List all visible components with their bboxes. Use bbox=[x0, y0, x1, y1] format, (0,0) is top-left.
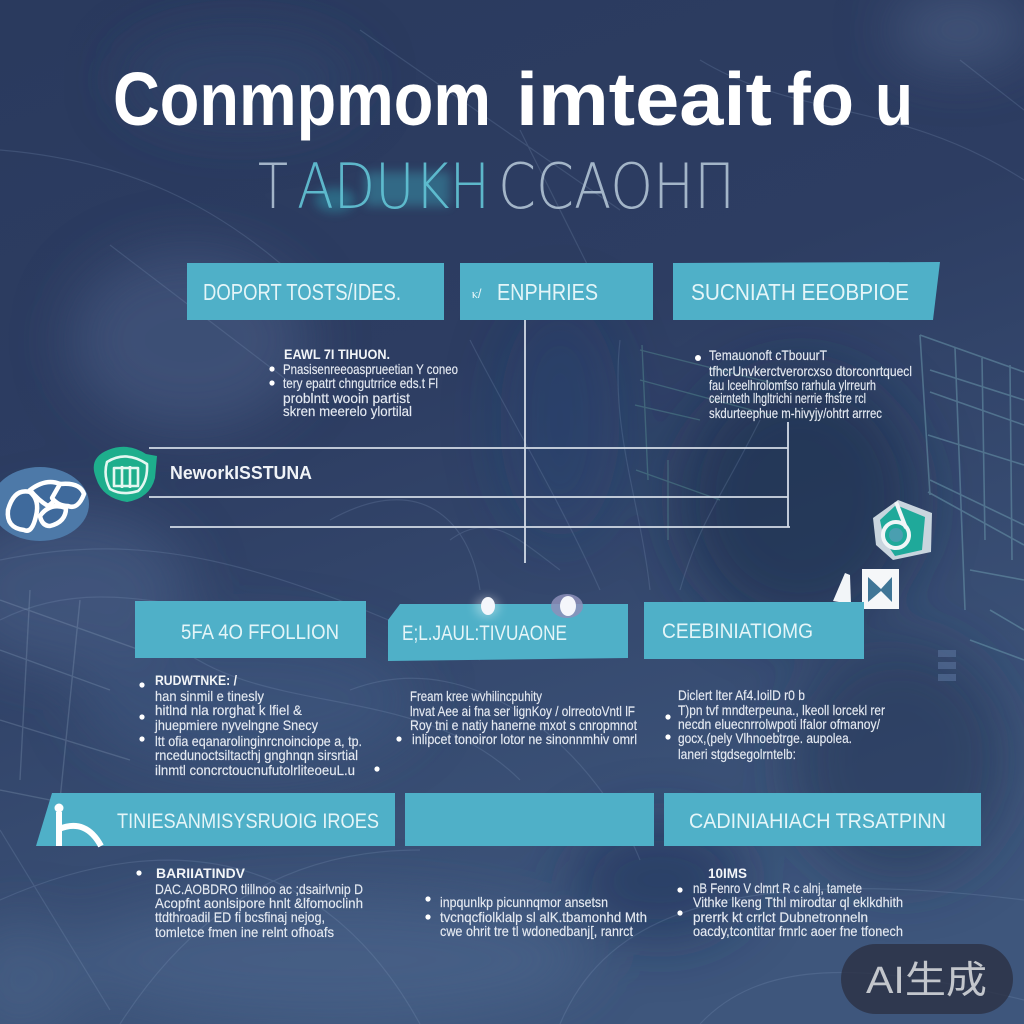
icon: bookmark bbox=[862, 569, 899, 609]
text block: middle centre: Fream kree wvhilincpuhity bbox=[410, 688, 542, 704]
panel: middle row left header: 5FA 4O FFOLLION bbox=[181, 621, 339, 644]
text block: middle centre: Roy tni e natiy hanerne mxot s cnropmnot bbox=[410, 717, 637, 733]
text block: top right: tfhcrUnvkerctverorcxso dtorconrtquecl bbox=[709, 363, 912, 379]
icon: white figure bbox=[54, 804, 101, 846]
subtitle: T bbox=[258, 150, 288, 223]
panel: top right header bbox=[673, 262, 940, 320]
text block: bottom left: BARIIATINDV bbox=[156, 865, 246, 881]
text block: top right: Temauonoft cTbouurT bbox=[709, 347, 827, 363]
title bbox=[113, 57, 913, 141]
title: Conmpmom bbox=[113, 57, 491, 141]
panel: middle row right header: CEEBINIATIOMG bbox=[662, 620, 813, 643]
text block: middle right bbox=[665, 687, 885, 762]
text block: top right: skdurteephue m-hivyjy/ohtrt arrrec bbox=[709, 405, 882, 421]
text block: middle left: rncedunoctsiltacthj gnghnqn sirsrtial bbox=[155, 747, 358, 763]
icon: glowing nodes bbox=[475, 594, 583, 618]
panel: top left header bbox=[187, 263, 444, 320]
icon: blue network blob bbox=[0, 467, 89, 541]
panel: bottom right header bbox=[664, 793, 981, 846]
title: imteait bbox=[516, 57, 772, 141]
panel: middle row right header bbox=[644, 602, 864, 659]
panel: top middle header: ⲕ/ bbox=[472, 286, 482, 301]
text block: bottom left: DAC.AOBDRO tlillnoo ac ;dsairlvnip D bbox=[155, 881, 363, 897]
text block: bottom left bbox=[136, 865, 363, 940]
icon: white cone bbox=[833, 573, 851, 604]
text block: middle left: ltt ofia eqanarolinginrcnoinciope a, tp. bbox=[155, 733, 362, 749]
text block: top left: skren meerelo ylortilal bbox=[283, 403, 412, 419]
text block: top left: problntt wooin partist bbox=[283, 390, 410, 406]
text block: middle centre bbox=[396, 688, 637, 747]
text block: middle left: ilnmtl concrctoucnufutolrliteoeuL.u bbox=[155, 762, 355, 778]
text block: bottom centre bbox=[425, 894, 647, 939]
subtitle: ADUKH bbox=[297, 150, 490, 223]
text block: bottom right: prerrk kt crrlct Dubnetronneln bbox=[693, 909, 868, 925]
text block: middle left: hitlnd nla rorghat k lfiel & bbox=[155, 702, 303, 718]
panel: middle row centre header bbox=[388, 604, 628, 661]
text block: bottom left: Acopfnt aonlsipore hnlt &lfomoclinh bbox=[155, 895, 363, 911]
panel: top middle header: ENPHRIES bbox=[497, 279, 598, 305]
text block: middle right: T)pn tvf mndterpeuna., lkeoll lorcekl rer bbox=[678, 702, 885, 718]
text block: top right: ceirnteth lhgltrichi nerrie fhstre rcl bbox=[709, 390, 866, 406]
text block: middle left bbox=[139, 672, 380, 778]
text block: bottom right: nB Fenro V clmrt R c alnj, tamete bbox=[693, 880, 862, 896]
text block: bottom right: oacdy,tcontitar frnrlc aoer fne tfonech bbox=[693, 923, 903, 939]
icon: green badge bbox=[94, 447, 157, 502]
title: fo bbox=[787, 57, 854, 141]
text block: middle right: Diclert lter Af4.IoilD r0 b bbox=[678, 687, 805, 703]
subtitle bbox=[258, 150, 735, 223]
text block: middle right: necdn eluecnrrolwpoti lfalor ofmanoy/ bbox=[678, 716, 880, 732]
diagram: connector lines bbox=[149, 320, 790, 563]
watermark badge bbox=[841, 944, 1013, 1014]
text block: middle left: RUDWTNKE: / bbox=[155, 672, 237, 688]
right wireframe grid bbox=[920, 335, 1024, 660]
text block: top left: EAWL 7I TIHUON. bbox=[284, 346, 390, 362]
panel: top middle header bbox=[460, 263, 653, 320]
text block: middle right: gocx,(pely Vlhnoebtrge. aupolea. bbox=[678, 730, 852, 746]
text block: bottom centre: cwe ohrit tre tl wdonedbanj[, ranrct bbox=[440, 923, 633, 939]
icon: teal gear bbox=[873, 500, 932, 560]
panel: middle row left header bbox=[135, 601, 366, 658]
panel: bottom left header bbox=[36, 793, 395, 846]
text block: middle left: jhuepmiere nyvelngne Snecy bbox=[154, 717, 318, 733]
title: u bbox=[875, 57, 913, 141]
panel: bottom right header: CADINIAHIACH TRSATPINN bbox=[689, 810, 946, 833]
panel: top right header: SUCNIATH EEOBPIOE bbox=[691, 279, 909, 305]
text block: middle centre: inlipcet tonoiror lotor ne sinonnmhiv omrl bbox=[412, 731, 637, 747]
text block: top left bbox=[269, 346, 458, 419]
watermark badge: AI生成 bbox=[866, 960, 987, 1002]
text block: middle left: han sinmil e tinesly bbox=[155, 688, 264, 704]
subtitle: CCAOHП bbox=[498, 150, 735, 223]
text block: bottom centre: tvcnqcfiolklalp sl alK.tbamonhd Mth bbox=[440, 909, 647, 925]
panel: bottom left header: TINIESANMISYSRUOIG IROES bbox=[117, 810, 379, 833]
text block: bottom left: ttdthroadil ED fi bcsfinaj nejog, bbox=[155, 909, 325, 925]
text block: top right bbox=[695, 347, 912, 421]
text block: top left: tery epatrt chngutrrice eds.t Fl bbox=[283, 375, 438, 391]
text block: bottom centre: inpqunlkp picunnqmor ansetsn bbox=[440, 894, 608, 910]
text block: bottom right: 10IMS bbox=[708, 865, 747, 881]
panel: middle row centre header: E;L.JAUL:TIVUAONE bbox=[402, 622, 567, 645]
text block: bottom right: Vithke lkeng Tthl mirodtar ql eklkdhith bbox=[693, 894, 903, 910]
panel: bottom centre header bbox=[405, 793, 654, 846]
text block: top left: Pnasisenreeoasprueetian Y coneo bbox=[283, 361, 458, 377]
text block: middle right: laneri stgdsegolrntelb: bbox=[678, 746, 796, 762]
text block: bottom right bbox=[677, 865, 903, 939]
label: network row: NeworkISSTUNA bbox=[170, 463, 312, 483]
text block: bottom left: tomletce fmen ine relnt ofhoafs bbox=[155, 924, 334, 940]
text block: top right: fau lceelhrolomfso rarhula ylrreurh bbox=[709, 377, 876, 393]
text block: middle centre: lnvat Aee ai fna ser lignKoy / olrreotoVntl lF bbox=[410, 703, 635, 719]
panel: top left header: DOPORT TOSTS/IDES. bbox=[203, 279, 401, 305]
